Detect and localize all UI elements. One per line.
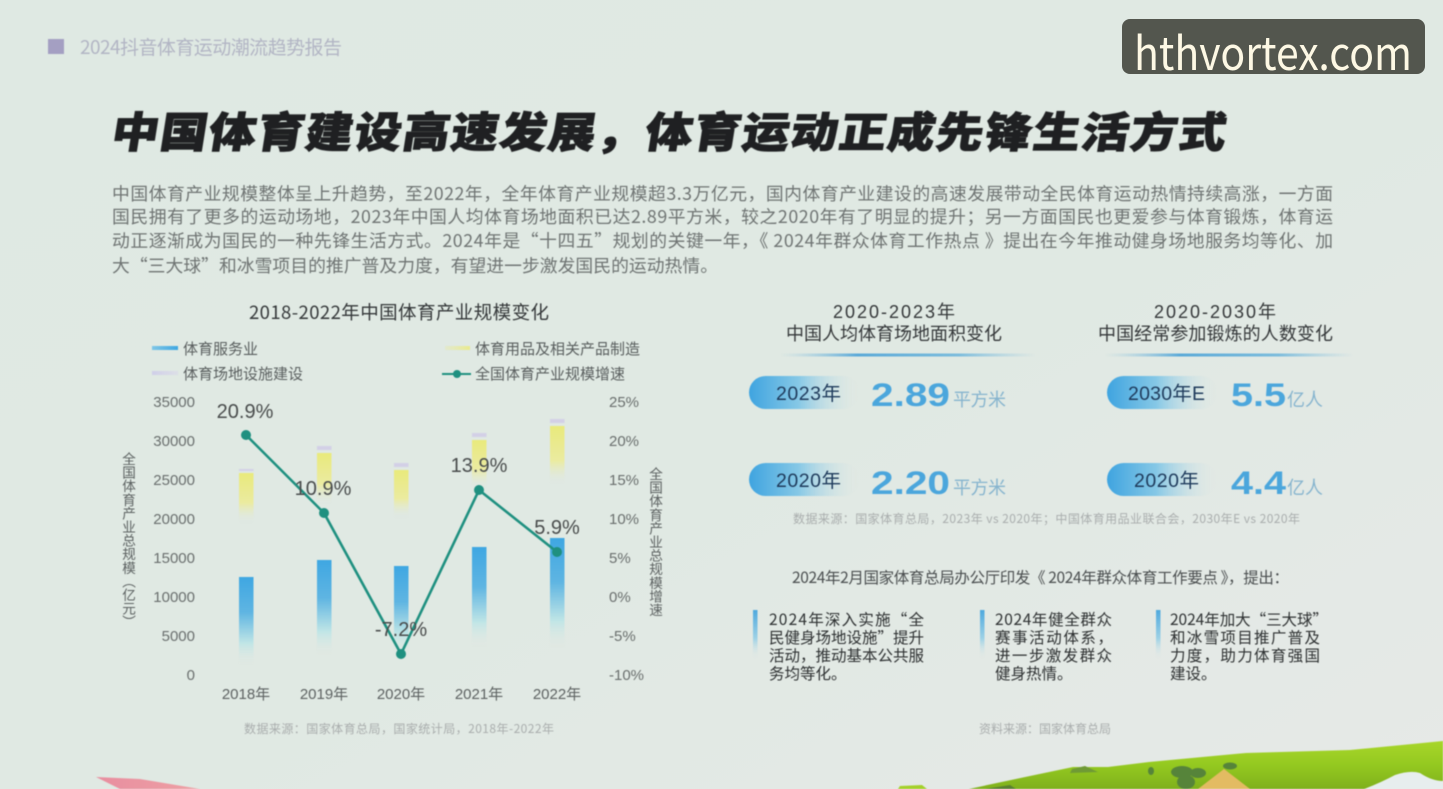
policy point 1: [753, 608, 924, 684]
2023 value: 2.89: [871, 377, 950, 413]
growth rate line: [241, 430, 562, 659]
right axis labels: 20%: [609, 433, 639, 450]
2020 value: 平方米: [953, 474, 1006, 500]
heading: 中国经常参加锻炼的人数变化: [1098, 320, 1333, 346]
heading: [1098, 302, 1333, 346]
legend: 体育场地设施建设: [183, 363, 303, 384]
watermark: hthvortex.com: [1134, 18, 1412, 84]
left axis labels: [153, 394, 195, 684]
2023 value: [749, 376, 1006, 413]
2030E value: 2030年E: [1128, 383, 1205, 405]
heading: 中国人均体育场地面积变化: [786, 320, 1002, 346]
2020 value: 4.4: [1231, 465, 1286, 501]
left axis labels: 5000: [162, 628, 195, 645]
year labels: [222, 686, 581, 703]
report header: 2024抖音体育运动潮流趋势报告: [80, 33, 342, 60]
panel: regular exercisers: [1098, 302, 1353, 501]
source: stats panels: 数据来源：国家体育总局，2023年 vs 2020年；中国体育用品业联合会，2030年E vs 2020年: [793, 510, 1300, 527]
legend: [152, 338, 640, 384]
policy point 3: [1156, 608, 1328, 684]
intro paragraph: [112, 180, 1333, 278]
right axis labels: 25%: [609, 394, 639, 411]
policy point 3: 力度，助力体育强国: [1170, 644, 1320, 666]
intro paragraph: 大“三大球”和冰雪项目的推广普及力度，有望进一步激发国民的运动热情。: [112, 252, 718, 278]
right axis labels: 0%: [609, 589, 631, 606]
right axis labels: 15%: [609, 472, 639, 489]
right axis labels: 5%: [609, 550, 631, 567]
policy point 2: [980, 608, 1113, 684]
year labels: 2018年: [222, 686, 270, 703]
heading: 2020-2023年: [833, 302, 955, 322]
2030E value: 亿人: [1287, 386, 1323, 412]
policy point 3: 2024年加大“三大球”: [1170, 608, 1328, 630]
growth data labels: 20.9%: [217, 401, 274, 423]
left axis labels: 10000: [153, 589, 195, 606]
policy point 1: 民健身场地设施”提升: [769, 626, 924, 648]
title: 中国体育建设高速发展，体育运动正成先锋生活方式: [108, 99, 1232, 159]
left axis labels: 35000: [153, 394, 195, 411]
right axis labels: -5%: [609, 628, 636, 645]
2020 value: [749, 463, 1006, 501]
left axis labels: 15000: [153, 550, 195, 567]
right axis labels: [609, 394, 644, 684]
intro paragraph: 中国体育产业规模整体呈上升趋势，至2022年，全年体育产业规模超3.3万亿元，国内体育产业建设的高速发展带动全民体育运动热情持续高涨，一方面: [112, 180, 1333, 206]
2030E value: 5.5: [1231, 377, 1286, 413]
left axis title: 全国体育产业总规模（亿元）: [119, 451, 139, 629]
source: policy: 资料来源：国家体育总局: [979, 720, 1111, 737]
left axis labels: 25000: [153, 472, 195, 489]
right axis title: 全国体育产业总规模增速: [646, 466, 666, 618]
year labels: 2022年: [533, 686, 581, 703]
policy point 2: 健身热情。: [995, 662, 1073, 684]
panel: sports industry chart: [119, 299, 666, 737]
2020 value: [1107, 463, 1323, 501]
policy point 1: 务均等化。: [769, 662, 847, 684]
right axis labels: 10%: [609, 511, 639, 528]
2030E value: [1107, 376, 1323, 413]
service bars: [239, 538, 564, 665]
policy point 1: 2024年深入实施“全: [769, 608, 924, 630]
2023 value: 2023年: [776, 383, 841, 405]
policy point 3: 建设。: [1170, 662, 1217, 684]
heading: [786, 302, 1002, 346]
intro paragraph: 动正逐渐成为国民的一种先锋生活方式。2024年是“十四五”规划的关键一年，《 2024年群众体育工作热点 》提出在今年推动健身场地服务均等化、加: [112, 227, 1333, 253]
legend: 体育用品及相关产品制造: [475, 338, 640, 359]
policy point 3: 和冰雪项目推广普及: [1170, 626, 1320, 648]
2020 value: 2020年: [1134, 470, 1199, 492]
decoration: pink shape: [96, 777, 200, 789]
policy point 1: 活动，推动基本公共服: [769, 644, 924, 666]
heading: 2020-2030年: [1154, 302, 1276, 322]
legend: 体育服务业: [183, 338, 258, 359]
decoration: green hill landscape: [898, 741, 1443, 789]
policy point 2: 进一步激发群众: [995, 644, 1112, 666]
2023 value: 平方米: [953, 386, 1006, 412]
chart source: 数据来源：国家体育总局，国家统计局，2018年-2022年: [244, 720, 554, 737]
chart title: 2018-2022年中国体育产业规模变化: [249, 299, 549, 325]
legend: 全国体育产业规模增速: [475, 363, 625, 384]
year labels: 2019年: [300, 686, 348, 703]
2020 value: 2.20: [871, 465, 950, 501]
policy point 2: 赛事活动体系，: [995, 626, 1113, 648]
growth data labels: 10.9%: [295, 478, 352, 500]
2020 value: 亿人: [1287, 474, 1323, 500]
panel: venue area per capita: [749, 302, 1036, 501]
growth data labels: 13.9%: [451, 455, 508, 477]
goods manufacturing bars: [239, 426, 564, 523]
growth data labels: 5.9%: [534, 517, 580, 539]
policy heading: 2024年2月国家体育总局办公厅印发《 2024年群众体育工作要点 》，提出：: [792, 566, 1289, 588]
policy point 2: 2024年健全群众: [995, 608, 1112, 630]
left axis labels: 20000: [153, 511, 195, 528]
left axis labels: 0: [187, 667, 195, 684]
right axis labels: -10%: [609, 667, 644, 684]
2020 value: 2020年: [776, 470, 841, 492]
intro paragraph: 国民拥有了更多的运动场地，2023年中国人均体育场地面积已达2.89平方米，较之2020年有了明显的提升；另一方面国民也更爱参与体育锻炼，体育运: [112, 203, 1333, 229]
growth data labels: -7.2%: [375, 619, 427, 641]
year labels: 2020年: [377, 686, 425, 703]
growth data labels: [217, 401, 580, 641]
venue construction bars: [239, 419, 564, 471]
year labels: 2021年: [455, 686, 503, 703]
left axis labels: 30000: [153, 433, 195, 450]
